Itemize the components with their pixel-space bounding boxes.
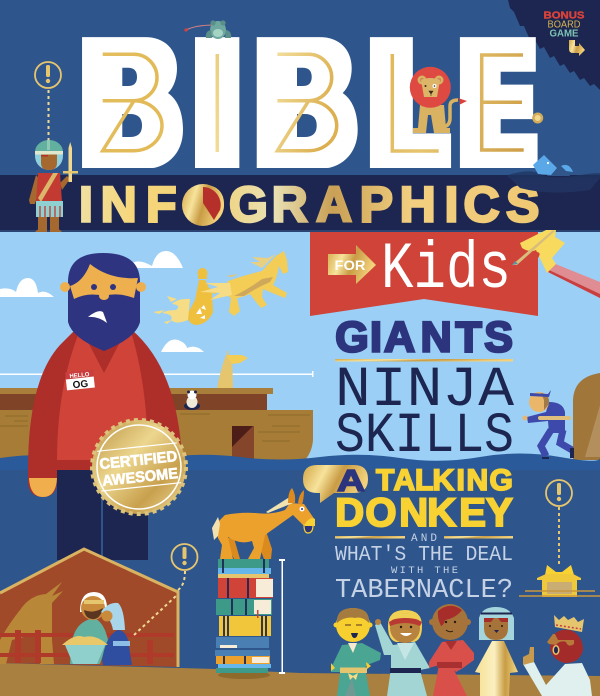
seal: certified awesome: CERTIFIED bbox=[99, 448, 178, 473]
corner flag: bonus board game: BOARD bbox=[548, 20, 580, 30]
rock bbox=[573, 373, 600, 460]
icon: gold coin bbox=[532, 112, 543, 124]
text: what's the deal: WHAT'S THE DEAL bbox=[335, 544, 513, 567]
icon: lion bbox=[410, 67, 467, 133]
ground bbox=[0, 663, 600, 696]
icon: giraffe bbox=[217, 351, 248, 388]
water bbox=[0, 454, 600, 480]
icon: FOR arrow bbox=[328, 245, 376, 284]
icon: ark of the covenant bbox=[519, 480, 600, 597]
title: BIBLE: E bbox=[468, 10, 527, 196]
icon: exclamation with dotted line bbox=[35, 62, 61, 143]
title: BIBLE bbox=[88, 9, 527, 196]
name tag bbox=[65, 370, 95, 392]
corner flag: bonus board game bbox=[508, 0, 600, 90]
icon: panda bbox=[184, 390, 200, 410]
character: king bbox=[523, 615, 592, 696]
ark bbox=[0, 388, 313, 460]
icon: exclamation with dotted line to stable bbox=[134, 544, 198, 635]
title: BIBLE: B bbox=[263, 9, 350, 196]
icon: ninja bbox=[522, 390, 574, 459]
icon: pie chart O bbox=[182, 184, 224, 226]
icon: FOR arrow: FOR bbox=[334, 258, 366, 273]
text: tabernacle: TABERNACLE? bbox=[335, 576, 513, 606]
rock highlight bbox=[585, 405, 600, 457]
icon: fiery chariot and horse bbox=[153, 251, 288, 325]
speech bubble: A bbox=[303, 463, 368, 503]
height marker bbox=[279, 559, 285, 674]
name tag: OG bbox=[72, 379, 89, 391]
giant character: Og bbox=[28, 253, 182, 560]
heading: DONKEY: DONKEY bbox=[335, 491, 513, 535]
stable bbox=[0, 549, 178, 667]
name tag: HELLO bbox=[69, 372, 90, 380]
banner: red bbox=[310, 232, 538, 316]
seal: certified awesome bbox=[92, 420, 186, 514]
title: BIBLE: I bbox=[201, 10, 233, 196]
character: boy in green bbox=[331, 608, 381, 696]
character: person in gold robe bbox=[475, 607, 518, 696]
icon: hand and pencil bbox=[512, 230, 600, 298]
heading: TALKING: TALKING bbox=[376, 464, 513, 497]
heading: infographics: O bbox=[186, 176, 225, 232]
heading: GIANTS: GIANTS bbox=[335, 314, 513, 362]
clouds bbox=[0, 251, 204, 352]
title: BIBLE: L bbox=[377, 10, 440, 196]
band: infographics bbox=[0, 175, 600, 232]
heading: infographics bbox=[79, 176, 539, 232]
stack of books bbox=[215, 559, 273, 679]
heading: infographics: GRAPHICS bbox=[229, 176, 539, 232]
divider: AND: AND bbox=[411, 533, 437, 545]
icon: fish in water bbox=[508, 155, 600, 193]
heading: Kids: Kids bbox=[381, 232, 511, 307]
sky bbox=[0, 232, 600, 462]
text: with the: WITH THE bbox=[391, 565, 458, 577]
icon: donkey bbox=[212, 488, 315, 559]
character: man in red bbox=[429, 604, 474, 696]
corner flag: bonus board game: GAME bbox=[550, 28, 579, 40]
heading: infographics: INF bbox=[79, 176, 177, 232]
speech bubble: A: A bbox=[337, 463, 365, 498]
heading: NINJA: NINJA bbox=[335, 359, 515, 423]
seal: certified awesome: AWESOME bbox=[101, 465, 179, 490]
corner flag: bonus board game: BONUS bbox=[544, 10, 584, 22]
divider: gold bbox=[335, 359, 513, 362]
character: girl in light blue bbox=[375, 610, 430, 696]
horizon line bbox=[0, 371, 314, 377]
icon: roman soldier bbox=[29, 140, 78, 233]
icon: frog bbox=[184, 20, 231, 39]
heading: SKILLS: SKILLS bbox=[335, 405, 514, 469]
title: BIBLE: B bbox=[88, 9, 175, 196]
